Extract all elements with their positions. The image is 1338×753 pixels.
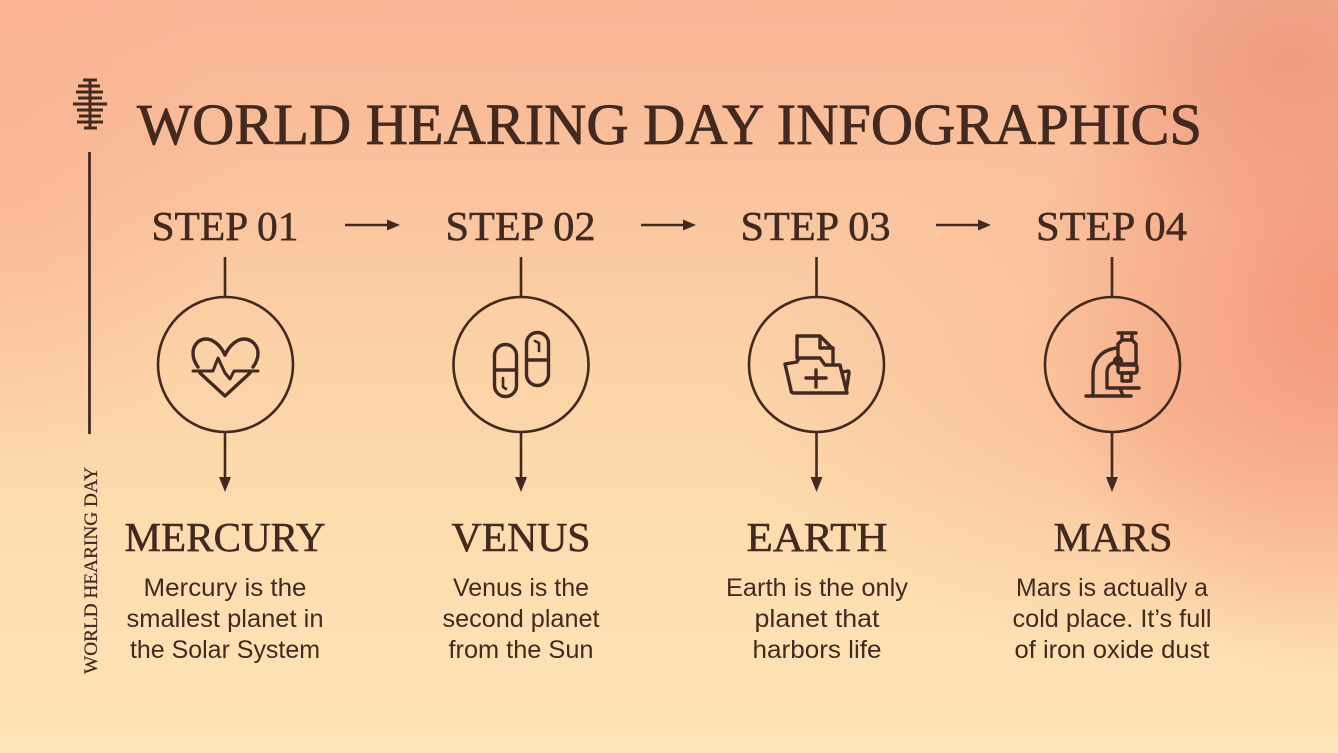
name: mercury: MERCURY <box>124 514 326 560</box>
name: mars: MARS <box>1054 514 1172 560</box>
connector and arrow <box>1106 257 1118 492</box>
description: venus: Venus is the <box>453 574 589 602</box>
description: mars: of iron oxide dust <box>1014 636 1210 664</box>
icon: microscope <box>1086 333 1139 396</box>
icon: pills <box>494 332 548 396</box>
description: earth: Earth is the only <box>726 574 909 602</box>
heading: step 03: STEP 03 <box>740 203 890 249</box>
heading: step 01: STEP 01 <box>152 203 298 249</box>
description: mercury <box>126 574 324 664</box>
icon: medical folder <box>785 336 849 393</box>
description: venus <box>442 574 600 664</box>
panel: step 01 mercury <box>124 203 326 664</box>
circle <box>1045 297 1180 432</box>
arrow: step 3 to 4 <box>936 220 991 230</box>
circle <box>454 297 588 432</box>
description: mercury: the Solar System <box>130 636 320 664</box>
description: earth: planet that <box>754 605 880 633</box>
description: venus: from the Sun <box>448 636 594 664</box>
description: mars <box>1012 574 1212 664</box>
heading: step 04: STEP 04 <box>1036 203 1187 249</box>
arrow: step 1 to 2 <box>345 220 400 230</box>
description: mercury: Mercury is the <box>144 574 306 602</box>
panel: step 03 earth <box>726 203 909 664</box>
icon: heart with pulse <box>193 339 258 396</box>
description: mars: Mars is actually a <box>1016 574 1208 602</box>
circle <box>158 297 293 432</box>
circle <box>749 297 884 432</box>
description: earth <box>726 574 909 664</box>
connector and arrow <box>219 257 231 492</box>
connector and arrow <box>810 257 822 492</box>
description: earth: harbors life <box>752 636 882 664</box>
arrow: step 2 to 3 <box>641 220 696 230</box>
description: mercury: smallest planet in <box>126 605 324 633</box>
description: venus: second planet <box>442 605 600 633</box>
title: WORLD HEARING DAY INFOGRAPHICS <box>137 92 1202 157</box>
description: mars: cold place. It’s full <box>1012 605 1212 633</box>
vertical label: WORLD HEARING DAY <box>81 467 102 674</box>
panel: step 02 venus <box>442 203 600 664</box>
name: venus: VENUS <box>452 514 590 560</box>
name: earth: EARTH <box>746 514 888 560</box>
vertical rule <box>88 152 91 434</box>
heading: step 02: STEP 02 <box>446 203 596 249</box>
connector and arrow <box>515 257 527 492</box>
icon: sound wave <box>73 80 107 128</box>
panel: step 04 mars <box>1012 203 1212 664</box>
